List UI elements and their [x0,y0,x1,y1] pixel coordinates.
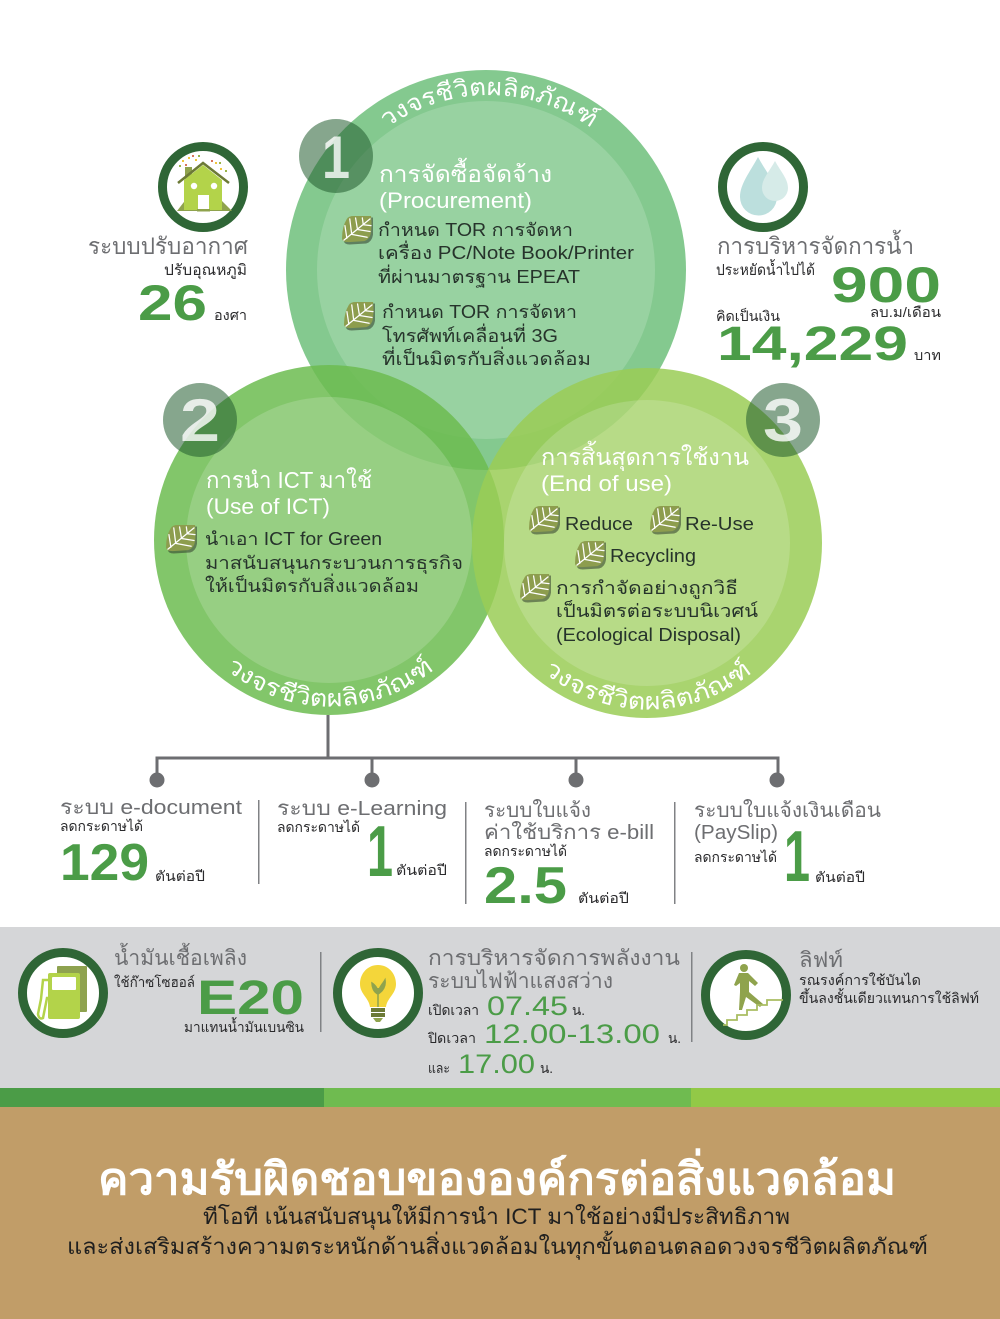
stat: e-learning: ระบบ e-Learning [277,798,447,820]
text: end of use: การกำจัดอย่างถูกวิธี [556,578,738,599]
stat: e-document: ตันต่อปี [155,868,205,884]
number: E20: E20 [197,972,304,1025]
heading: energy management: การบริหารจัดการพลังงาน [428,947,680,970]
venn diagram: product lifecycle [154,70,822,718]
leaf bullet: reduce [529,506,560,535]
label: water saved: ประหยัดน้ำไปได้ [716,259,815,279]
heading: fuel: น้ำมันเชื้อเพลิง [114,943,247,970]
text: use of ICT: มาสนับสนุนกระบวนการธุรกิจ [205,553,463,574]
text: end of use: (Ecological Disposal) [556,625,741,645]
stat: e-bill: ระบบใบแจ้ง [484,799,591,822]
stat: e-document [60,797,243,892]
footer line 2: และส่งเสริมสร้างความตระหนักด้านสิ่งแวดล้อมในทุกขั้นตอนตลอดวงจรชีวิตผลิตภัณฑ์ [67,1231,928,1260]
curved label: top circle: วงจรชีวิตผลิตภัณฑ์ [382,77,602,127]
number badge 3 [746,383,820,457]
text: procurement: ที่ผ่านมาตรฐาน EPEAT [378,264,580,288]
lights-off time: น. [668,1030,681,1046]
circle 2: use of ICT [154,365,504,715]
leaf bullet: recycling [575,541,606,570]
text: end of use [520,441,758,645]
leaf bullet [344,302,375,331]
stat: e-document: ลดกระดาษได้ [60,818,143,834]
icon: green house [162,146,244,228]
heading: lift: ลิฟท์ [799,948,843,972]
text: end of use: Reduce [565,514,633,534]
circle 3: end of use [472,368,822,718]
icon: fuel pump [22,952,104,1034]
text: end of use: Recycling [610,546,696,566]
lights-on time: เปิดเวลา [428,1002,479,1018]
icon: water drops [722,146,804,228]
stat: payslip [694,799,881,897]
text: procurement: (Procurement) [379,188,532,213]
unit: degrees: องศา [214,307,247,323]
number badge 1 [299,119,373,193]
lights-on time: 07.45 [487,991,568,1021]
stat: e-bill: ตันต่อปี [578,890,629,906]
unit: baht: บาท [914,347,941,363]
text: procurement: เครื่อง PC/Note Book/Printer [378,240,634,263]
text: end of use: การสิ้นสุดการใช้งาน [541,441,749,471]
text: use of ICT: นำเอา ICT for Green [205,529,382,549]
text: procurement: โทรศัพท์เคลื่อนที่ 3G [382,323,558,346]
number badge 2 [163,383,237,457]
leaf bullet: disposal [520,574,551,603]
leaf bullet [166,525,197,554]
curved label: right circle: วงจรชีวิตผลิตภัณฑ์ [550,656,750,710]
stat: payslip: (PaySlip) [694,822,778,844]
number: 14,229: 14,229 [717,318,908,371]
label: value in money: คิดเป็นเงิน [716,307,780,324]
energy block [338,947,681,1079]
sub-heading: lighting: ระบบไฟฟ้าแสงสว่าง [428,969,613,993]
leaf bullet [342,216,373,245]
footer title: ความรับผิดชอบขององค์กรต่อสิ่งแวดล้อม [98,1148,896,1204]
unit: cubic metres per month: ลบ.ม/เดือน [870,304,941,320]
number: 26 degrees: 26 [138,275,207,331]
stat: e-document: 129 [60,834,149,892]
circle 1: procurement [286,70,686,470]
text: end of use: เป็นมิตรต่อระบบนิเวศน์ [556,599,758,621]
stat: payslip: ตันต่อปี [815,869,865,885]
lights-on time [428,991,585,1021]
stat: e-bill: 2.5 [484,857,567,915]
panel: grey band [0,927,1000,1088]
evening time: และ [428,1060,450,1076]
text: use of ICT [166,467,463,596]
text: one floor instead of lift: ขึ้นลงชั้นเดียวแทนการใช้ลิฟท์ [799,988,979,1006]
heading: air conditioning: ระบบปรับอากาศ [88,233,248,259]
label: adjust temperature: ปรับอุณหภูมิ [164,262,247,280]
colour stripe [0,1088,1000,1107]
stat: payslip: ระบบใบแจ้งเงินเดือน [694,799,881,822]
fuel block [22,943,304,1035]
stat: e-bill: ค่าใช้บริการ e-bill [484,821,654,844]
number badge 2: 2 [180,387,220,454]
evening time: น. [540,1060,553,1076]
icon: person climbing stairs [706,954,786,1036]
footer line 1: ทีโอที เน้นสนับสนุนให้มีการนำ ICT มาใช้อย่างมีประสิทธิภาพ [203,1204,790,1230]
text: end of use: Re-Use [685,514,754,534]
text: use of ICT: (Use of ICT) [206,494,330,519]
stat: payslip: ลดกระดาษได้ [694,849,777,865]
text: procurement [342,158,634,369]
text: use of ICT: ให้เป็นมิตรกับสิ่งแวดล้อม [205,573,419,596]
connector tree [150,715,784,788]
text: stairs campaign: รณรงค์การใช้บันได [799,972,921,988]
leaf bullet: re-use [650,506,681,535]
lift block [706,948,979,1036]
text: use of ICT: การนำ ICT มาใช้ [206,467,372,493]
evening time: 17.00 [458,1049,535,1079]
stat: e-document: ระบบ e-document [60,797,243,819]
heading: water management: การบริหารจัดการน้ำ [717,230,914,259]
lights-off time: 12.00-13.00 [484,1019,660,1049]
curved label: left circle: วงจรชีวิตผลิตภัณฑ์ [232,653,432,707]
stat: e-bill [484,799,654,915]
number badge 1: 1 [322,124,350,191]
label: use gasohol: ใช้ก๊าซโซฮอล์ [114,974,195,990]
stat: e-bill: ลดกระดาษได้ [484,843,567,859]
number badge 3: 3 [763,387,803,454]
number: 900: 900 [831,257,941,313]
text: procurement: การจัดซื้อจัดจ้าง [379,158,552,187]
stat: payslip: 1 [784,817,810,897]
air conditioning block [88,146,248,331]
stat: e-learning: 1 [367,812,393,892]
text: procurement: ที่เป็นมิตรกับสิ่งแวดล้อม [382,346,591,369]
stat: e-learning: ลดกระดาษได้ [277,819,360,835]
lights-off time [428,1019,681,1049]
panel: footer [0,1107,1000,1319]
evening time [428,1049,553,1079]
label: replacing benzene: มาแทนน้ำมันเบนซิน [184,1017,304,1035]
lights-on time: น. [572,1002,585,1018]
text: procurement: กำหนด TOR การจัดหา [378,220,573,240]
stat: e-learning: ตันต่อปี [396,862,447,878]
text: procurement: กำหนด TOR การจัดหา [382,302,577,322]
lights-off time: ปิดเวลา [428,1030,476,1046]
icon: light bulb [338,952,418,1034]
text: end of use: (End of use) [541,471,672,496]
water management block [716,146,941,371]
stat: e-learning [277,798,447,892]
